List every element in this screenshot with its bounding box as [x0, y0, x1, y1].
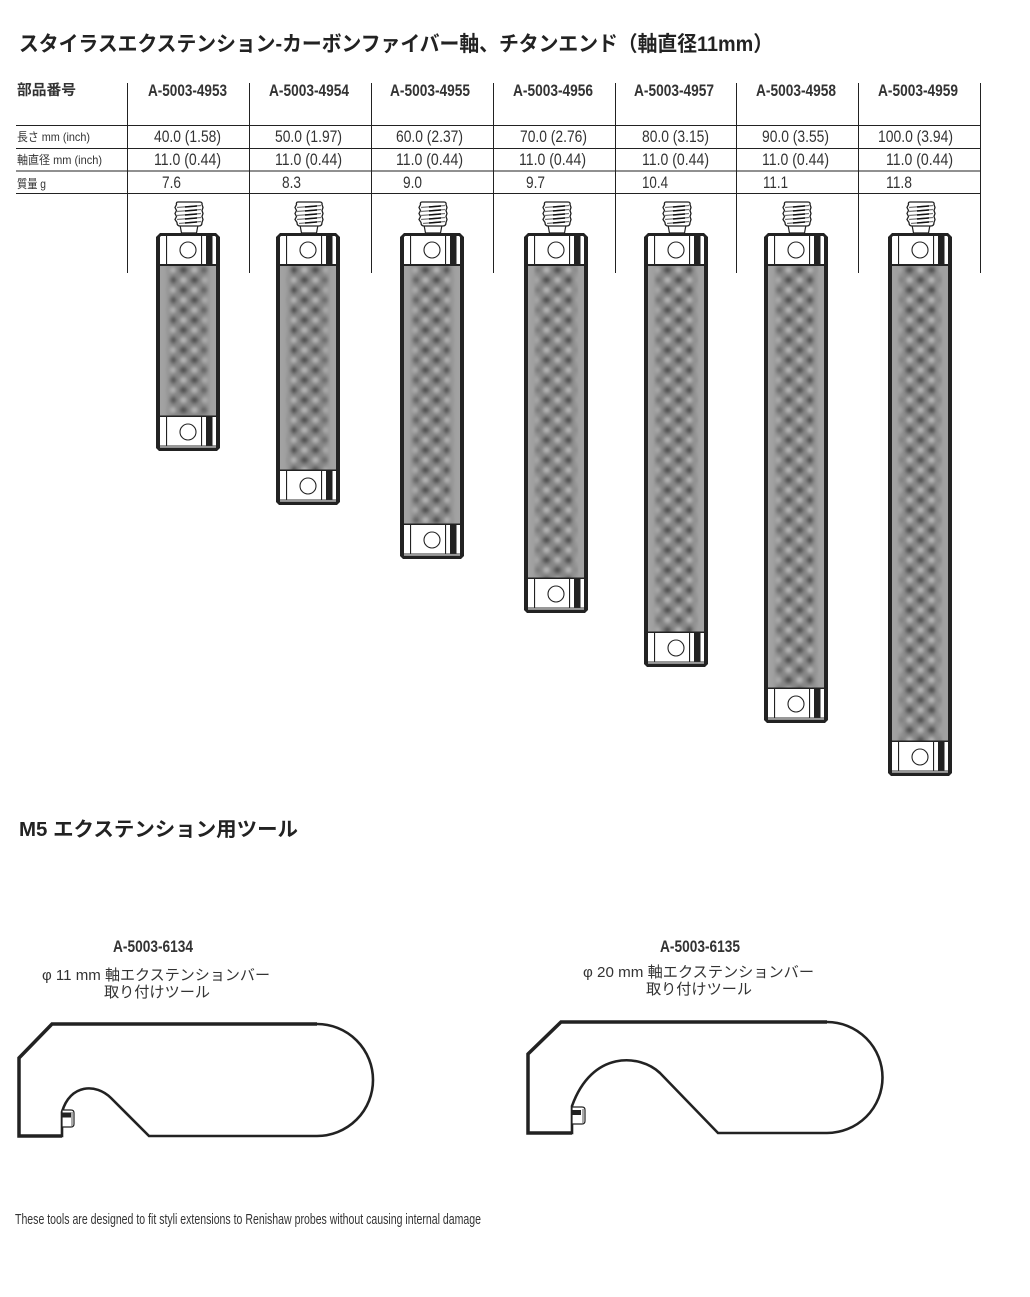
mass values: 8.3	[282, 174, 301, 192]
mass values: 9.7	[526, 174, 545, 192]
description: 取り付けツール	[104, 984, 210, 1001]
locating pin	[62, 1110, 74, 1127]
row label: shaft diameter: 軸直径 mm (inch)	[17, 152, 102, 167]
part number headers: A-5003-4955	[390, 82, 470, 100]
stylus extension A-5003-4955	[400, 202, 464, 559]
specification table	[16, 82, 980, 273]
footnote: These tools are designed to fit styli extensions to Renishaw probes without causing internal damage	[15, 1212, 481, 1228]
description: 取り付けツール	[646, 981, 752, 998]
part number headers: A-5003-4956	[513, 82, 593, 100]
diameter values: 11.0 (0.44)	[519, 151, 586, 169]
stylus extension A-5003-4958	[764, 202, 828, 723]
part number headers: A-5003-4959	[878, 82, 958, 100]
mass values: 7.6	[162, 174, 181, 192]
stylus extension A-5003-4959	[888, 202, 952, 776]
heading: M5 extension tool: M5 エクステンション用ツール	[19, 818, 298, 841]
description	[42, 967, 270, 1001]
row label: part number: 部品番号	[17, 82, 76, 99]
stylus extension A-5003-4957	[644, 202, 708, 667]
length values	[154, 128, 953, 146]
diameter values: 11.0 (0.44)	[886, 151, 953, 169]
description: φ 11 mm 軸エクステンションバー	[42, 967, 270, 984]
diameter values: 11.0 (0.44)	[762, 151, 829, 169]
length values: 90.0 (3.55)	[762, 128, 829, 146]
mass values: 9.0	[403, 174, 422, 192]
diameter values: 11.0 (0.44)	[396, 151, 463, 169]
mass values: 11.1	[763, 174, 788, 192]
tool A-5003-6135	[528, 938, 882, 1133]
part number: A-5003-6134	[113, 938, 194, 956]
part number headers: A-5003-4953	[148, 82, 227, 100]
mass values: 11.8	[886, 174, 912, 192]
diameter values: 11.0 (0.44)	[275, 151, 342, 169]
mass values	[162, 174, 912, 192]
diameter values: 11.0 (0.44)	[642, 151, 709, 169]
length values: 40.0 (1.58)	[154, 128, 221, 146]
tool A-5003-6134	[19, 938, 373, 1136]
stylus extension A-5003-4956	[524, 202, 588, 613]
part number headers: A-5003-4954	[269, 82, 350, 100]
description: φ 20 mm 軸エクステンションバー	[583, 964, 814, 981]
length values: 60.0 (2.37)	[396, 128, 463, 146]
diameter values: 11.0 (0.44)	[154, 151, 221, 169]
part number: A-5003-6135	[660, 938, 740, 956]
part number headers: A-5003-4958	[756, 82, 836, 100]
row label: length: 長さ mm (inch)	[17, 130, 90, 144]
tool outline	[528, 1022, 882, 1133]
length values: 100.0 (3.94)	[878, 128, 953, 146]
part number headers	[148, 82, 958, 100]
diameter values	[154, 151, 953, 169]
stylus extension A-5003-4953	[156, 202, 220, 451]
length values: 50.0 (1.97)	[275, 128, 342, 146]
stylus extension A-5003-4954	[276, 202, 340, 505]
row label: mass: 質量 g	[17, 176, 46, 191]
locating pin	[572, 1107, 585, 1124]
length values: 70.0 (2.76)	[520, 128, 587, 146]
length values: 80.0 (3.15)	[642, 128, 709, 146]
description	[583, 964, 814, 998]
part number headers: A-5003-4957	[634, 82, 714, 100]
mass values: 10.4	[642, 174, 668, 192]
title: スタイラスエクステンション-カーボンファイバー軸、チタンエンド（軸直径11mm）	[19, 33, 773, 56]
tool outline	[19, 1024, 373, 1136]
